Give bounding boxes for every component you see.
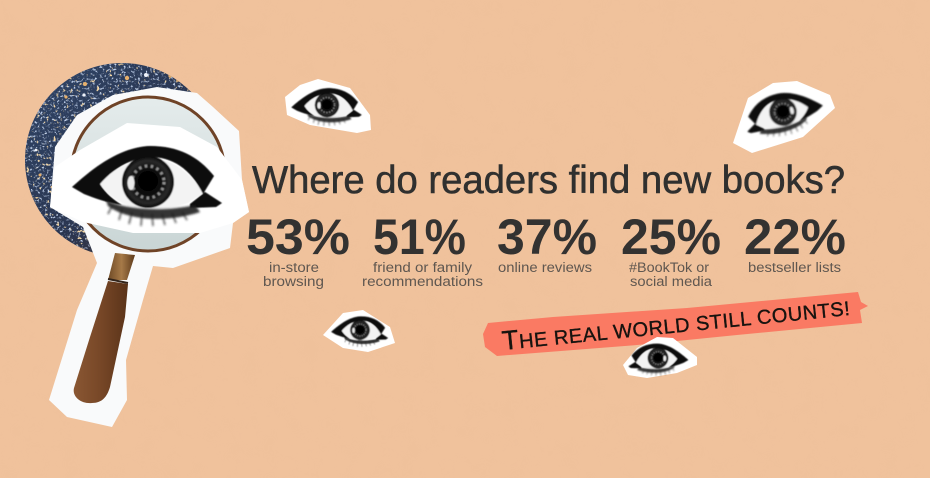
- large eye: [72, 146, 222, 226]
- stat: BookTok or social media: [621, 209, 721, 289]
- eye: top right: [733, 81, 835, 153]
- eye: lower left: [323, 310, 395, 352]
- neck of handle: [108, 253, 135, 280]
- callout banner: [483, 291, 868, 356]
- stat: BookTok or social media: 25%: [621, 209, 721, 265]
- eye: top centre: [285, 79, 371, 133]
- wooden handle: [74, 281, 128, 403]
- handwritten message: THE REAL WORLD STILL COUNTS!: [501, 291, 851, 356]
- lens: [71, 97, 225, 251]
- stat: in-store browsing: [246, 209, 350, 289]
- stat: in-store browsing: in-store: [269, 260, 319, 275]
- stat: BookTok or social media: social media: [630, 274, 713, 289]
- stat: friend or family recommendations: friend or family: [373, 260, 472, 275]
- white paper cutout: [49, 87, 249, 427]
- stat: bestseller lists: bestseller lists: [748, 260, 841, 275]
- magnifying glass cutout: [49, 87, 249, 427]
- infographic canvas: [25, 63, 868, 427]
- stat: bestseller lists: 22%: [744, 209, 846, 265]
- stat: friend or family recommendations: [362, 209, 483, 289]
- coral tape: [483, 292, 868, 356]
- handle collar: [108, 279, 128, 283]
- galaxy circle: [25, 63, 192, 252]
- white strip behind large eye: [50, 123, 249, 233]
- stat: friend or family recommendations: recommendations: [362, 274, 483, 289]
- eye: bottom centre: [623, 337, 697, 378]
- stat: in-store browsing: 53%: [246, 209, 350, 265]
- title: Where do readers find new books?: [252, 159, 845, 202]
- stat: online reviews: online reviews: [498, 260, 592, 275]
- stat: in-store browsing: browsing: [263, 274, 324, 289]
- stat: friend or family recommendations: 51%: [373, 209, 466, 265]
- stat: online reviews: 37%: [497, 209, 597, 265]
- stat: BookTok or social media: #BookTok or: [629, 260, 710, 275]
